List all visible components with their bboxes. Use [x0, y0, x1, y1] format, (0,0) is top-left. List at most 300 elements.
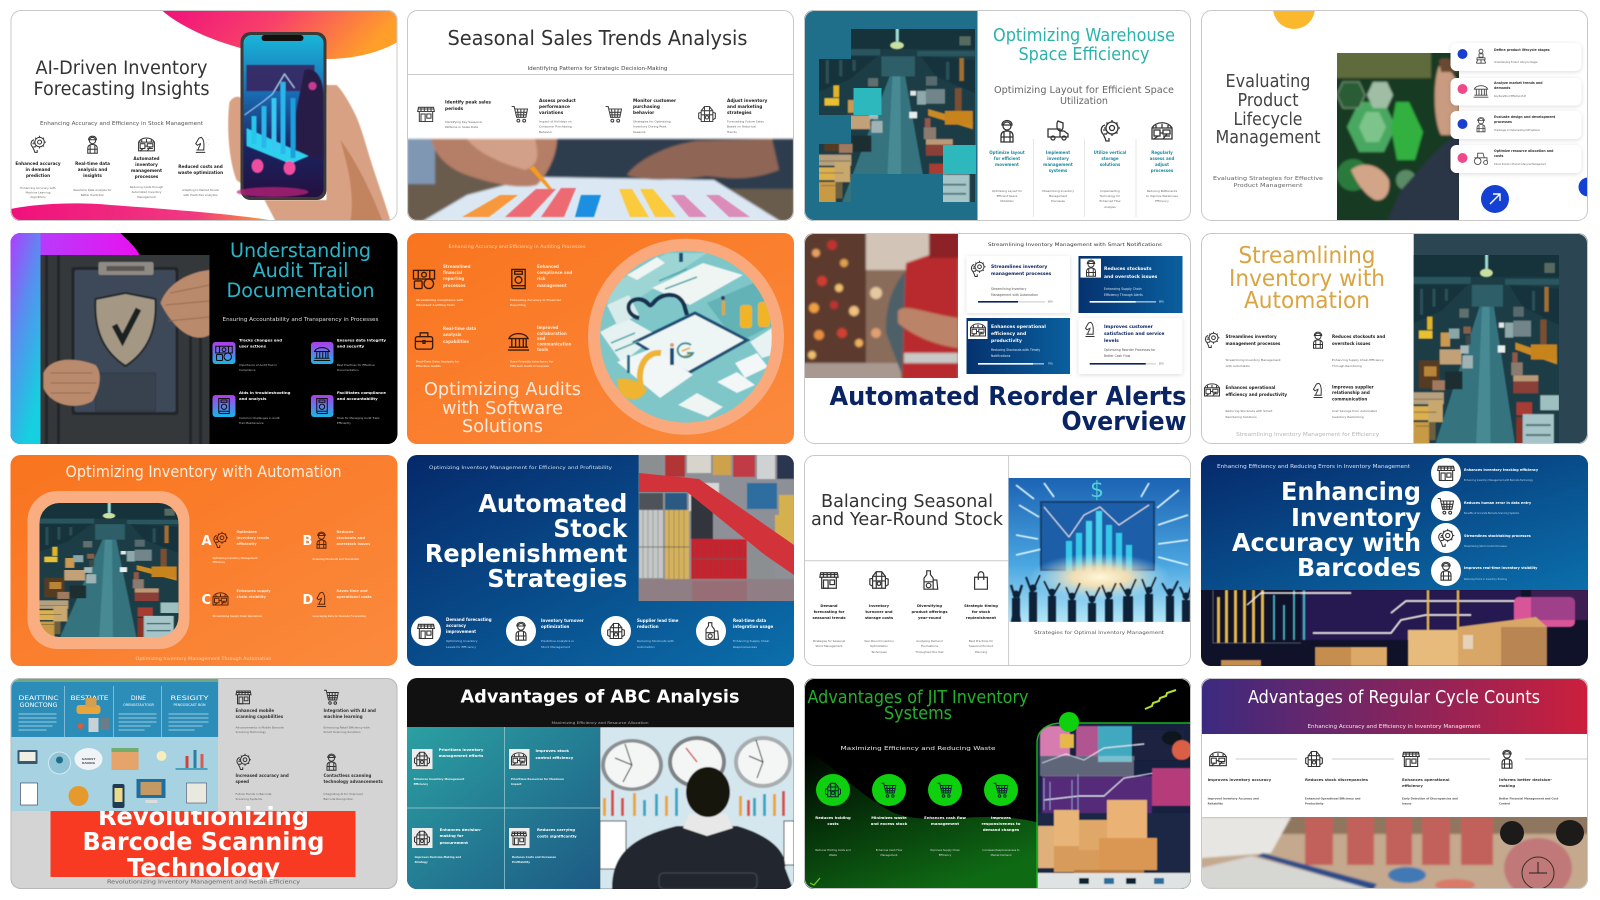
item: tracking efficiency [1431, 458, 1539, 488]
item: adjust inventory [699, 98, 767, 134]
item: stock control: control efficiency [536, 755, 574, 760]
panel: seasonal sales trends [407, 10, 794, 221]
item: troubleshooting: Common Challenges in Audit [239, 416, 280, 420]
step card: define lifecycle stages [1450, 43, 1582, 71]
card: customer satisfaction: Optimizing Reorder Processes for [1104, 348, 1156, 352]
item: automated processes: Reducing Costs through [130, 185, 163, 189]
item D: operational costs [336, 595, 372, 599]
title [811, 491, 1004, 530]
title: Management [1216, 128, 1321, 148]
step card: define lifecycle stages: Define product lifecycle stages [1494, 48, 1550, 52]
item C: C [202, 593, 211, 608]
subtitle [994, 86, 1174, 104]
card: streamlines processes: Streamlining Inventory [991, 287, 1027, 291]
photo: warehouse aisle [1411, 252, 1562, 447]
title: Optimizing Inventory with Automation [66, 462, 342, 481]
photo: hands holding clipboard with shield [36, 251, 216, 447]
yellow semicircle [1273, 11, 1315, 29]
item A: Optimizing Inventory Management [212, 557, 258, 560]
item: operational efficiency [1204, 384, 1287, 419]
item: reduces human error [1431, 491, 1532, 521]
item: responsiveness: responsiveness to [982, 821, 1021, 826]
zigzag accent [1145, 690, 1176, 709]
item: optimize layout: Optimizing Layout for [992, 189, 1023, 193]
title: Advantages of JIT Inventory [808, 687, 1029, 708]
item: prioritizes efforts: Enhances Inventory Management [414, 777, 465, 781]
infographic image: RESIGITY [170, 695, 209, 702]
title [1229, 243, 1385, 314]
item: contactless scanning [324, 754, 383, 801]
item: financial reporting: financial [443, 270, 463, 275]
item: stock discrepancies: Enhanced Operational Efficiency and [1305, 796, 1361, 800]
item: inventory accuracy: Reliability [1208, 802, 1223, 806]
card: operational efficiency: 70% [1048, 362, 1053, 366]
title [808, 687, 1029, 724]
item: tracking efficiency: Enhancing Inventory Management with Barcode Technology [1464, 479, 1534, 482]
caption: Strategies for Optimal Inventory Management [1034, 630, 1164, 636]
subtitle: Optimizing Layout for Efficient Space [994, 85, 1174, 96]
item: decision making [1499, 750, 1559, 806]
panel: automated reorder alerts [801, 230, 1191, 444]
title: Strategies [487, 564, 627, 593]
item: vertical storage: solutions [1100, 162, 1121, 167]
item D: Leveraging Data for Demand Forecasting [312, 615, 366, 618]
item: real-time analysis: analysis and [78, 167, 107, 172]
item: financial reporting [413, 264, 471, 307]
step card: market trends: Key Benefits of Effective PLM [1494, 95, 1526, 98]
title: Revolutionizing [98, 802, 309, 831]
item: AI integration [324, 690, 376, 734]
item: prioritizes efforts: Efficiency [414, 782, 428, 786]
card: operational efficiency: productivity [991, 338, 1022, 344]
item: financial reporting: reporting [443, 276, 464, 281]
item: compliance: Tools for Managing Audit Trails [336, 416, 380, 420]
item: inventory turnover: turnover and [865, 610, 893, 614]
item: carrying costs: costs significantly [537, 834, 577, 838]
card: operational efficiency: efficiency and [991, 331, 1026, 337]
item: operational efficiency: Reordering Solutions [1226, 415, 1257, 419]
title: with Software [442, 398, 563, 419]
item: contactless scanning: technology advancements [324, 779, 383, 784]
card: streamlines processes [966, 256, 1070, 313]
red title band [50, 811, 356, 877]
item: optimize layout: Utilization [1000, 199, 1014, 203]
item: operational efficiency: efficiency [1402, 783, 1423, 788]
item: minimizes waste: Enhances Cash Flow [876, 848, 903, 852]
item: real-time data: Enhancing Supply Chain [733, 639, 770, 643]
title [1216, 72, 1321, 148]
item: customer behavior [606, 98, 677, 134]
item: demand forecasting: Levels for Efficiency [446, 645, 476, 649]
item C [202, 589, 271, 618]
item: inventory accuracy [1208, 752, 1272, 806]
item: real-time data: integration usage [733, 624, 773, 629]
item: financial reporting: Streamlined [443, 264, 471, 269]
item: streamlines processes: with Automation [1226, 364, 1250, 368]
step card: resource allocation: costs [1494, 154, 1504, 158]
step card: resource allocation [1450, 145, 1582, 173]
infographic image: ORENGSTAUTOGR [123, 703, 155, 707]
item: contactless scanning: Integrating AI for Improved [324, 792, 363, 796]
item: decision making: Enhances decision- [440, 827, 482, 832]
title [994, 28, 1174, 64]
infographic image: DEAITTINC [18, 695, 58, 702]
subtitle: Enhancing Accuracy and Efficiency in Stock Management [40, 121, 203, 127]
item: mobile scanning [236, 691, 284, 734]
step card: design and development [1450, 111, 1582, 139]
item: real-time analysis: Effective Audits [416, 364, 441, 368]
item: customer behavior: Seasons [633, 130, 646, 134]
item B: B [302, 534, 312, 549]
step card: market trends: demands [1494, 86, 1510, 90]
item: peak sales periods: Identifying Key Seasonal [445, 120, 482, 124]
item: strategic timing: replenishment [966, 616, 996, 620]
subtitle: Optimizing Inventory Management for Efficiency and Profitability [429, 465, 612, 471]
step card: design and development: processes [1494, 120, 1512, 124]
item: peak sales periods: periods [445, 106, 464, 112]
item: cash flow [924, 774, 966, 857]
item: contactless scanning: Contactless scanning [324, 773, 372, 778]
item: accuracy and speed: Scanning Systems [236, 797, 263, 801]
panel: audit trail documentation [10, 233, 398, 447]
item: inventory turnover: storage costs [865, 616, 894, 620]
item: vertical storage: Analysis [1104, 205, 1116, 209]
item: lead time reduction [601, 616, 679, 649]
item: reduces stockouts: Reduces stockouts and [1332, 334, 1385, 339]
image: celebrating crowd and rising chart [1008, 478, 1192, 622]
item: supplier relationship: communication [1332, 396, 1367, 402]
title: Space Efficiency [1018, 44, 1150, 65]
item: inventory turnover [864, 572, 894, 654]
item: customer behavior: purchasing [633, 104, 660, 110]
item: operational efficiency [1402, 752, 1458, 806]
title: AI-Driven Inventory [36, 58, 208, 79]
item: inventory turnover: Inventory [869, 604, 890, 608]
item: decision making: Strategy [415, 860, 428, 864]
item: decision making [412, 827, 482, 864]
item: accuracy and speed [236, 754, 289, 801]
item: stock control: Improves stock [536, 748, 569, 753]
title: Stock [553, 514, 629, 543]
item: holding costs [815, 774, 851, 857]
panel: advantages of regular cycle counts [1201, 678, 1591, 898]
item: inventory systems: Management [1049, 194, 1068, 198]
title [82, 802, 324, 882]
item: product performance: variations [539, 110, 564, 116]
item: responsiveness: demand changes [983, 827, 1020, 832]
item: real-time analysis: Real-time Data Analysis for [73, 188, 112, 192]
item: decision making: making for [440, 833, 463, 838]
item: adjust inventory: Based on Historical [727, 124, 756, 128]
item: streamlines processes: management processes [1226, 341, 1281, 346]
title: Barcode Scanning [82, 827, 324, 856]
item: inventory systems: management [1043, 162, 1073, 167]
item: real-time analysis: Real-time data [443, 326, 477, 331]
item: holding costs: Waste [829, 853, 837, 857]
item: adjust inventory: and marketing [727, 104, 762, 110]
item: tracks changes: Importance of Audit Trail in [239, 363, 277, 367]
item: vertical storage: storage [1101, 156, 1119, 161]
item: compliance: and accountability [337, 396, 378, 401]
item: vertical storage: Implementing [1100, 189, 1120, 193]
card: streamlines processes: Management with Automation [991, 293, 1038, 297]
panel: advantages of JIT [804, 678, 1192, 889]
item: automated processes: management [131, 168, 162, 173]
item: operational efficiency: Reducing Stockouts with Smart [1226, 409, 1273, 413]
item B: Reducing Stockouts and Overstocks [312, 558, 360, 561]
title: Automated Reorder Alerts [830, 382, 1186, 412]
item: lead time reduction: reduction [637, 624, 659, 629]
item: compliance: Efficiently [337, 421, 351, 425]
item: compliance [311, 390, 386, 425]
item: stock discrepancies [1305, 752, 1369, 806]
card: customer satisfaction: 85% [1159, 362, 1164, 366]
item: AI integration: Enhancing Retail Efficiency with [324, 726, 370, 730]
item: demand forecasting: improvement [446, 629, 476, 634]
item: collaboration: User-Friendly Interfaces for [510, 360, 554, 364]
panel: inventory accuracy with barcodes [1201, 455, 1588, 666]
item: data integrity: and security [337, 344, 365, 348]
item: demand forecasting: accuracy [446, 623, 466, 628]
title: and Year-Round Stock [811, 509, 1004, 530]
item: inventory systems: Streamlining Inventory [1042, 189, 1074, 193]
item: optimize layout: for efficient [994, 156, 1020, 161]
item: automated processes: Automated Inventory [132, 190, 162, 194]
item: collaboration: Improved [537, 325, 559, 330]
item: optimize layout: movement [995, 162, 1019, 167]
card: customer satisfaction: levels [1104, 338, 1119, 344]
title: Streamlining [1238, 243, 1376, 269]
item: stock discrepancies: Reduces stock discrepancies [1305, 777, 1369, 782]
card: streamlines processes: Streamlines inventory [991, 264, 1047, 270]
item: strategic timing: Best Practices for [969, 639, 994, 643]
item: minimizes waste [871, 774, 908, 857]
item: real-time analysis [415, 326, 477, 368]
title: Forecasting Insights [34, 79, 210, 100]
item: strategic timing: Seasonal Product [969, 644, 994, 648]
check accent [810, 878, 820, 885]
item: enhanced accuracy: in demand [26, 167, 50, 172]
title [226, 239, 374, 302]
item: accuracy and speed: Future Trends in Barcode [236, 792, 272, 796]
item B: overstock issues [336, 542, 370, 546]
item: tracking efficiency: Enhances inventory tracking efficiency [1464, 468, 1539, 472]
title [1232, 477, 1421, 582]
item: reduces stockouts [1314, 332, 1385, 368]
gradient header [1201, 678, 1588, 734]
item: real-time visibility: Reducing Errors in Inventory Tracking [1464, 578, 1508, 581]
item: prioritizes efforts [412, 747, 484, 786]
item: streamlines processes [1205, 332, 1281, 368]
title: Technology [127, 853, 280, 882]
item A: efficiently [236, 542, 257, 546]
item: troubleshooting: and analysis [239, 396, 267, 401]
item: diversifying offerings: Throughout the Year [914, 650, 945, 654]
item: demand forecasting: Strategies for Seasonal [813, 639, 845, 643]
item: decision making: Improves Decision-Making and [415, 855, 461, 859]
item: reduces human error: Benefits of Accurate Barcode Scanning Systems [1464, 512, 1520, 515]
item D: Saves time and [336, 589, 368, 593]
title: Balancing Seasonal [821, 491, 993, 512]
item: responsiveness [982, 774, 1021, 857]
title [425, 489, 629, 593]
item: turnover optimization: Inventory turnover [541, 618, 584, 623]
panel: warehouse space efficiency [804, 10, 1191, 221]
teal panel [407, 727, 600, 889]
title [424, 379, 581, 437]
title: Inventory with [1229, 266, 1385, 292]
bottom gradient swoosh [10, 203, 276, 221]
item: stock discrepancies: Productivity [1305, 802, 1324, 806]
item: demand forecasting: Demand [820, 604, 838, 608]
item D [302, 589, 372, 618]
item: automated processes [130, 138, 163, 199]
item: vertical storage: Technology for [1099, 194, 1121, 198]
gradient frame [10, 233, 140, 444]
item: mobile scanning: Enhanced mobile [236, 708, 274, 713]
subtitle: Enhancing Accuracy and Efficiency in Inventory Management [1308, 724, 1481, 730]
item: demand forecasting: seasonal trends [812, 616, 846, 620]
item: compliance and risk: Reporting [510, 303, 526, 307]
item: real-time visibility [1431, 556, 1538, 586]
item: enhanced accuracy: Enhancing Accuracy with [20, 186, 56, 190]
top right gradient swoosh [162, 10, 398, 59]
item: stock control: Prioritizes Resources for Maximum [511, 777, 564, 781]
panel: revolutionizing barcode scanning [10, 678, 398, 889]
item: carrying costs: Reduces carrying [537, 827, 575, 832]
card: reduces stockouts: 80% [1159, 300, 1164, 304]
photo: worker by a Christmas tree [801, 230, 961, 381]
item: enhanced accuracy: prediction [26, 173, 50, 178]
item: lead time reduction: Reducing Stockouts with [637, 639, 674, 643]
item: collaboration: and [537, 336, 546, 341]
item: reduced costs [178, 136, 223, 197]
item: mobile scanning: Advancements in Mobile Barcode [236, 726, 284, 730]
card: reduces stockouts [1078, 256, 1182, 313]
item: adjust inventory: Forecasting Future Sales [727, 120, 764, 124]
item: collaboration: Efficient Audit Processes [510, 364, 549, 368]
item: product performance: performance [539, 104, 570, 110]
item A: A [202, 534, 212, 549]
item: regularly assess: assess and [1150, 156, 1174, 161]
step card: resource allocation: Optimize resource allocation and [1494, 149, 1554, 153]
item: inventory turnover: Year-Round Inventory [864, 639, 894, 643]
item: adjust inventory: Trends [726, 130, 737, 134]
image: celebrating crowd and rising chart: $ [1090, 478, 1104, 503]
item: collaboration [508, 325, 572, 368]
item: adjust inventory: Adjust inventory [727, 98, 767, 104]
item: real-time visibility: Improves real-time inventory visibility [1464, 566, 1538, 570]
item: operational efficiency: Early Detection of Discrepancies and [1402, 796, 1458, 800]
item: reduces stockouts: Through Reordering [1331, 364, 1362, 368]
item: compliance and risk: Enhancing Accuracy in Financial [510, 298, 561, 302]
item: diversifying offerings: year-round [918, 616, 941, 620]
item: turnover optimization [506, 616, 584, 649]
item: prioritizes efforts: Prioritizes inventory [439, 747, 484, 752]
photo: man touching green hexagons [1337, 53, 1459, 220]
item: demand forecasting: Stock Management [815, 644, 843, 648]
infographic image: RADING [82, 761, 96, 765]
subtitle: Evaluating Strategies for Effective [1213, 176, 1324, 182]
title: Seasonal Sales Trends Analysis [448, 26, 748, 50]
item: inventory accuracy: Improved Inventory Accuracy and [1208, 796, 1259, 800]
item: compliance and risk: risk [537, 276, 546, 281]
item: real-time analysis: Real-Time Data Analysis for [416, 360, 460, 364]
item: real-time analysis [73, 136, 112, 197]
item: carrying costs: Profitability [512, 860, 530, 864]
step card: market trends [1450, 78, 1582, 106]
item: collaboration: collaboration [537, 331, 567, 336]
step card: resource allocation: Future Trends in Product Lifecycle Management [1494, 163, 1546, 166]
item: automated processes: Automated [133, 156, 160, 161]
item: diversifying offerings: product offerings [911, 610, 948, 614]
item: reduced costs: waste optimization [178, 170, 223, 175]
step card: market trends: Analyze market trends and [1494, 81, 1543, 85]
item: reduced costs: Reduced costs and [178, 164, 223, 169]
panel: optimizing inventory with automation [10, 455, 398, 666]
edge dot [1578, 178, 1587, 196]
item: inventory systems: inventory [1047, 156, 1069, 161]
card: operational efficiency [966, 318, 1070, 374]
item: demand forecasting [411, 616, 492, 649]
item: automated processes: Management [137, 195, 157, 199]
photo: shipping containers with red down arrow [632, 452, 802, 604]
item: peak sales periods: Identify peak sales [445, 100, 491, 106]
panel: balancing seasonal and year-round stock [804, 455, 1192, 666]
item: accuracy and speed: speed [236, 779, 249, 784]
item: diversifying offerings: Diversifying [917, 604, 942, 608]
item: operational efficiency: Enhances operational [1402, 777, 1449, 782]
item: regularly assess: Reducing Bottlenecks [1147, 189, 1178, 193]
item: lead time reduction: Automation [637, 645, 655, 649]
item: real-time analysis: Real-time data [75, 161, 110, 166]
title: Product [1238, 91, 1299, 111]
title: Enhancing [1281, 477, 1421, 506]
item: strategic timing: Planning [975, 650, 987, 654]
item: vertical storage [1094, 120, 1127, 209]
item C: Enhances supply [236, 589, 271, 593]
card: customer satisfaction [1078, 318, 1182, 374]
item: turnover optimization: optimization [541, 624, 569, 629]
title: Inventory [1291, 503, 1421, 532]
item: cash flow: Efficiency [939, 853, 952, 857]
item: stocktaking: Streamlines stocktaking processes [1464, 534, 1531, 538]
item: inventory systems: Implement [1046, 150, 1070, 155]
item: diversifying offerings: Analyzing Demand [916, 639, 943, 643]
card: operational efficiency: Enhances operational [991, 324, 1046, 330]
green ellipse [1059, 712, 1079, 732]
card: customer satisfaction: Better Cash Flow [1104, 354, 1131, 358]
panel: optimizing audits with software [407, 233, 794, 444]
title: Accuracy with [1232, 528, 1421, 557]
title: Optimizing Audits [424, 379, 581, 400]
item: reduces human error: Reduces human error in data entry [1464, 501, 1532, 505]
item: collaboration: communication [537, 342, 572, 346]
item: troubleshooting: Aids in troubleshooting [239, 390, 291, 395]
title [830, 382, 1186, 437]
arrow button [1481, 185, 1509, 213]
infographic image: PENGODCAST BON [173, 703, 206, 707]
photo: hands marking a chart [407, 139, 794, 221]
card: operational efficiency: Reducing Stockouts with Timely [991, 348, 1040, 352]
item: compliance: Facilitates compliance [337, 390, 386, 395]
title: Documentation [226, 279, 374, 302]
item: responsiveness: Improves [991, 815, 1012, 820]
item: real-time data: Real-time data [733, 618, 767, 623]
subtitle: Enhancing Efficiency and Reducing Errors in Inventory Management [1217, 464, 1410, 470]
item: troubleshooting: Trail Maintenance [238, 421, 264, 425]
item: financial reporting: processes [443, 283, 466, 288]
